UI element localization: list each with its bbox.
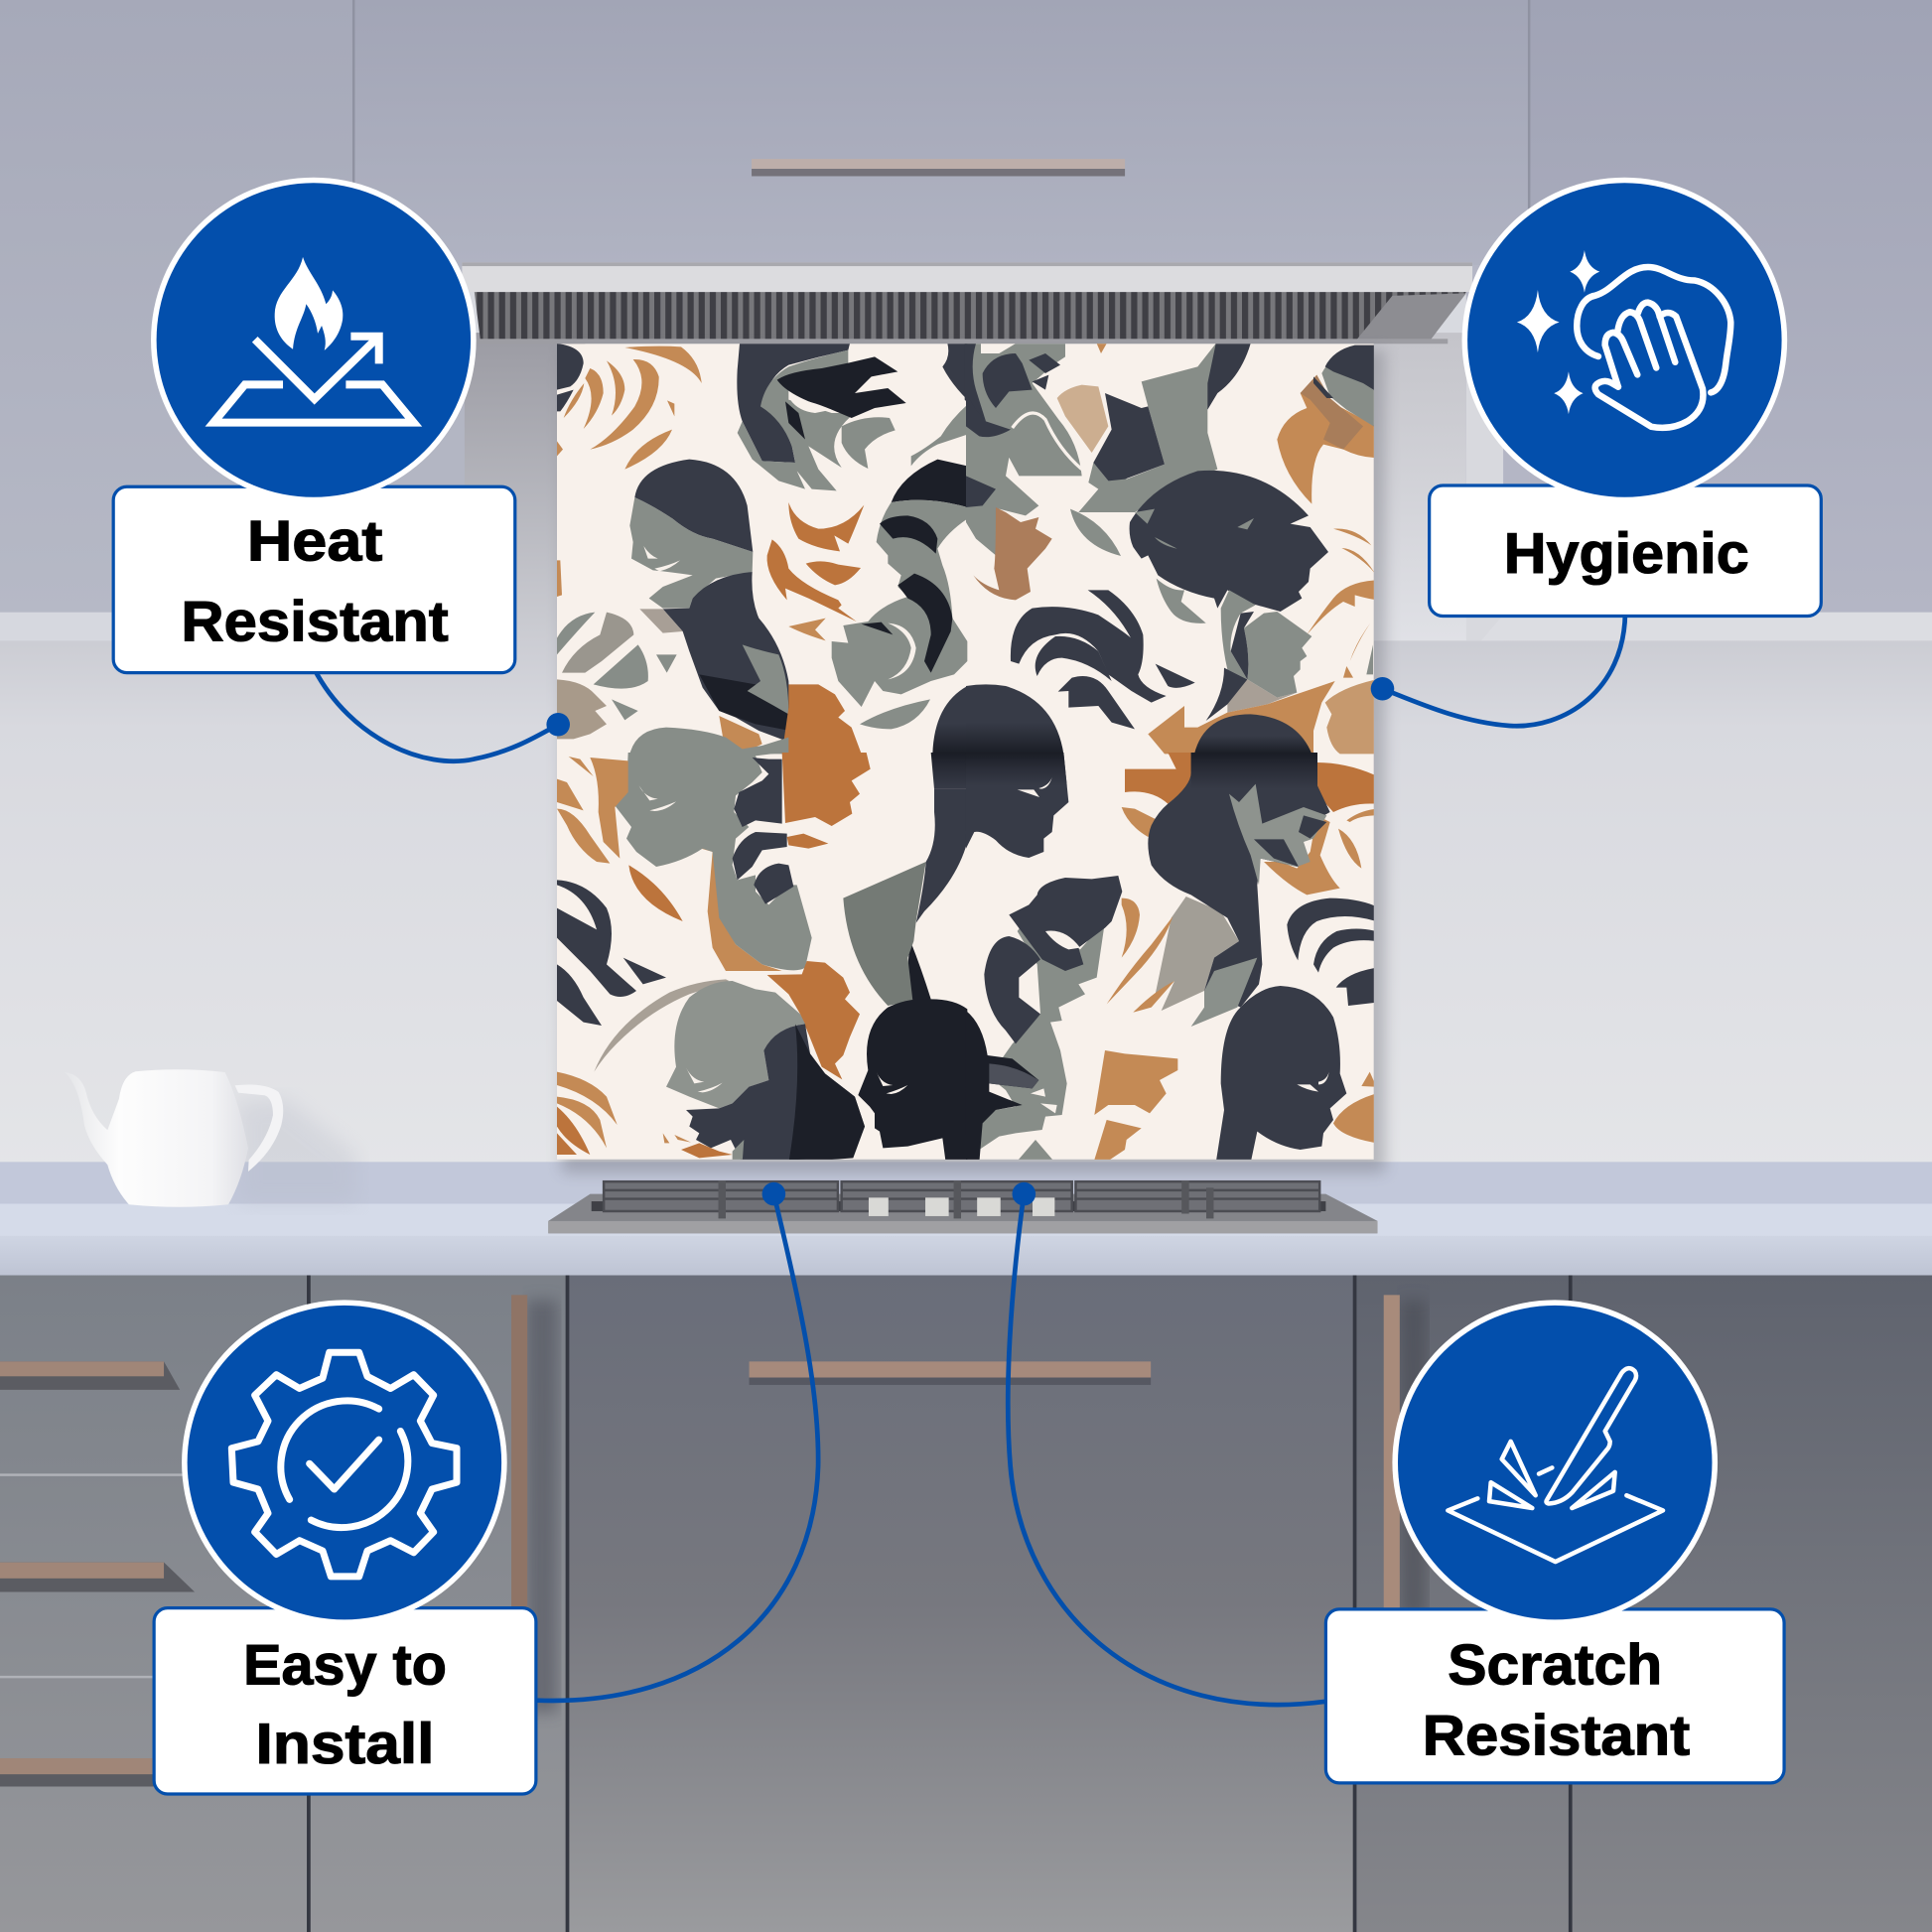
heading: Hygienic: Hygienic bbox=[1504, 522, 1749, 586]
icon badge: hand wiping bbox=[1462, 178, 1787, 502]
callout: Hygienic bbox=[1371, 178, 1821, 726]
upper cabinet right bbox=[1529, 0, 1932, 613]
panel: splashback pattern bbox=[557, 344, 1376, 1163]
panel shadow bbox=[562, 349, 1385, 1173]
heading: Heat Resistant: Heat bbox=[247, 510, 382, 574]
upper cabinet handle bbox=[752, 159, 1125, 176]
heading: Scratch Resistant: Scratch bbox=[1448, 1634, 1662, 1698]
label box: install bbox=[154, 1608, 536, 1794]
pattern: lower right quadrant bbox=[966, 753, 1376, 1163]
counter upstand bbox=[0, 1162, 1932, 1205]
heading: Easy to Install: Easy to bbox=[243, 1634, 447, 1698]
icon badge: gear with check bbox=[182, 1300, 507, 1625]
heading: Heat Resistant: Resistant bbox=[181, 590, 449, 653]
callout: Easy to Install bbox=[154, 1182, 818, 1794]
heading: Easy to Install: Install bbox=[256, 1713, 434, 1776]
extractor hood bbox=[462, 262, 1472, 344]
icon badge: knife scratching surface bbox=[1392, 1300, 1718, 1625]
connector: hygienic bbox=[1382, 614, 1625, 726]
callout: Heat Resistant bbox=[113, 178, 570, 761]
label box: heat bbox=[113, 486, 515, 673]
label box: hygienic bbox=[1430, 485, 1821, 617]
base cabinets bbox=[0, 1276, 1932, 1932]
upper cabinet centre bbox=[353, 0, 1529, 266]
heading: Scratch Resistant: Resistant bbox=[1423, 1704, 1690, 1767]
counter front bbox=[0, 1236, 1932, 1276]
connector: heat bbox=[314, 669, 558, 761]
cabinet trim left bbox=[0, 613, 117, 640]
pattern: upper left quadrant bbox=[557, 344, 967, 754]
connector: install bbox=[537, 1194, 818, 1701]
wall under hood left bbox=[462, 333, 586, 640]
counter top bbox=[0, 1204, 1932, 1237]
upper cabinet left bbox=[0, 0, 353, 613]
callout: Scratch Resistant bbox=[1008, 1182, 1784, 1783]
wall bbox=[0, 617, 1932, 1171]
pattern: upper right quadrant bbox=[965, 344, 1376, 754]
teapot bbox=[65, 1069, 357, 1207]
pattern: lower left quadrant bbox=[557, 753, 967, 1163]
connector dot: install bbox=[762, 1182, 785, 1205]
hob bbox=[548, 1180, 1378, 1233]
connector dot: scratch bbox=[1013, 1182, 1035, 1205]
wall under hood right bbox=[1355, 333, 1491, 640]
cabinet trim right bbox=[1481, 613, 1932, 640]
connector dot: hygienic bbox=[1371, 677, 1394, 701]
label box: scratch bbox=[1325, 1609, 1784, 1783]
connector: scratch bbox=[1008, 1194, 1324, 1705]
icon badge: flame over surface bbox=[151, 178, 477, 502]
connector dot: heat bbox=[546, 713, 570, 737]
cabinet handles bbox=[0, 1295, 1427, 1787]
